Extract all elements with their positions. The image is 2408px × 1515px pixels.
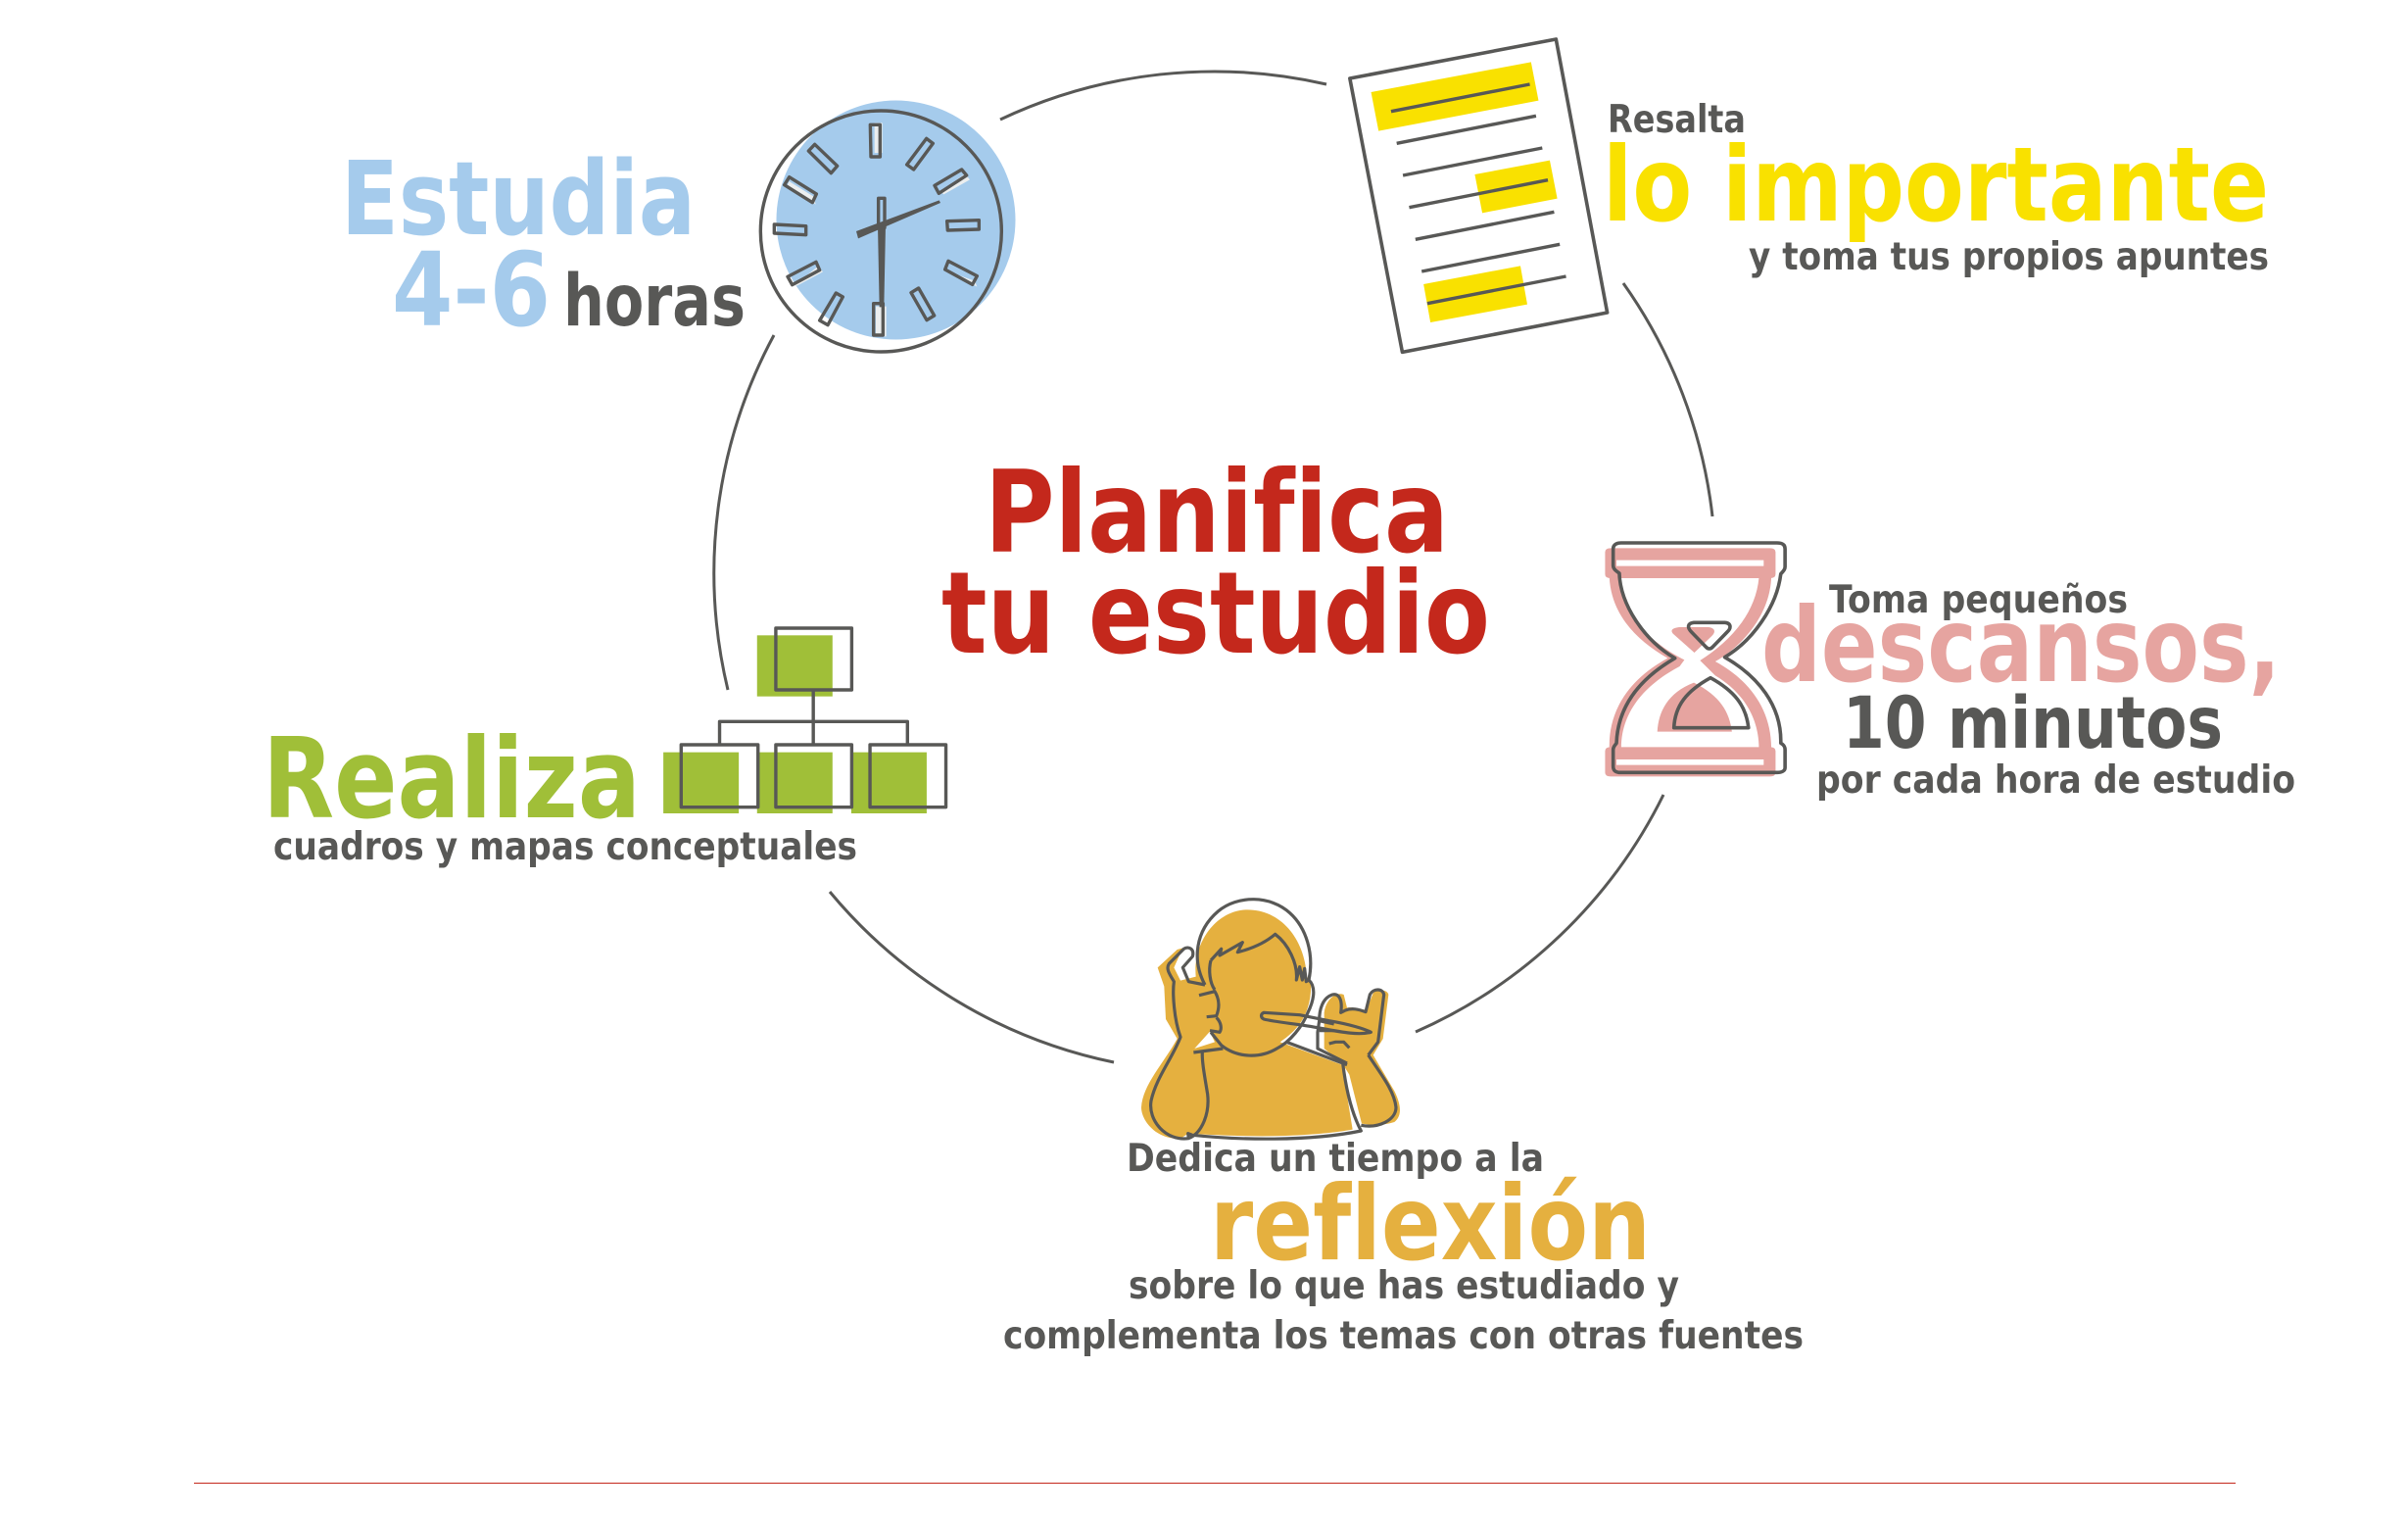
heading: realiza: Realiza: [263, 714, 641, 844]
text: por cada hora de estudio: por cada hora de estudio: [1816, 758, 2295, 803]
text: toma pequeños: Toma pequeños: [1829, 578, 2128, 622]
text: sobre lo que has estudiado y: sobre lo que has estudiado y: [1129, 1264, 1679, 1308]
panel: descansos: [1605, 543, 2295, 803]
text: 10 minutos: 10 minutos: [1843, 682, 2223, 765]
number: 4-6: 4-6: [392, 230, 551, 350]
panel: resalta lo importante: [1350, 39, 2269, 352]
title: Planifica: [985, 447, 1449, 579]
text: dedica un tiempo a la: Dedica un tiempo a la: [1127, 1137, 1544, 1181]
heading: descansos: descansos,: [1761, 586, 2281, 706]
text: complementa los temas con otras fuentes: complementa los temas con otras fuentes: [1003, 1314, 1804, 1358]
heading: estudia: Estudia: [341, 139, 696, 259]
icon: document with highlights: [1350, 39, 1608, 352]
text: cuadros y mapas conceptuales: cuadros y mapas conceptuales: [273, 825, 857, 869]
heading: lo importante: lo importante: [1603, 125, 2269, 245]
icon: hourglass: [1605, 543, 1785, 776]
icon: hierarchy chart: [663, 628, 946, 813]
title: [941, 447, 1490, 680]
panel: estudia 4-6 horas: [341, 100, 1015, 352]
panel: reflexion: [1003, 900, 1804, 1358]
heading: reflexion: reflexión: [1210, 1164, 1651, 1284]
bottom rule: [194, 1483, 2236, 1484]
text: horas: horas: [563, 260, 746, 343]
cycle ring arcs: [714, 72, 1712, 1062]
text: resalta: Resalta: [1608, 98, 1746, 142]
text: y toma tus propios apuntes: y toma tus propios apuntes: [1749, 235, 2269, 279]
title: tu estudio: [941, 548, 1490, 680]
icon: clock: [760, 100, 1015, 352]
icon: thinking child: [1141, 900, 1400, 1139]
panel: realiza: [263, 628, 946, 869]
